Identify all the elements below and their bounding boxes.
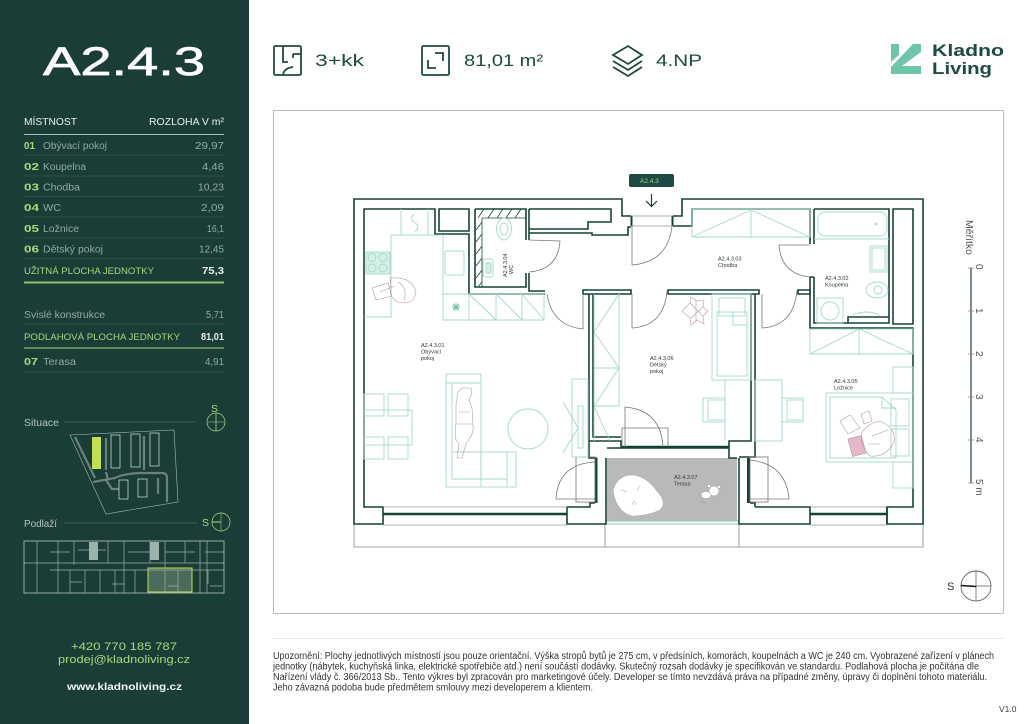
doors: [529, 226, 810, 502]
room labels: A2.4.3.05: [834, 379, 858, 385]
figure at kitchen: [372, 278, 416, 303]
disclaimer: Jeho závazná podoba bude předmětem smlouvy mezi developerem a klientem.: [273, 682, 593, 694]
table: rooms and areas: PODLAHOVÁ PLOCHA JEDNOTKY: [24, 332, 181, 343]
room labels: pokoj: [650, 369, 663, 375]
wc fixtures: [483, 218, 512, 277]
table: rooms and areas: 5,71: [206, 310, 224, 321]
room labels: WC: [509, 265, 515, 274]
room labels: [421, 253, 858, 488]
icon: entry arrow: [646, 194, 657, 206]
compass: [947, 571, 991, 601]
disclaimer: Nařízení vlády č. 366/2013 Sb.. Tento výkres byl zpracován pro marketingové účely. Developer se tímto nevzdává práva na případné změny, úpravy či doplnění tohoto materiálu.: [273, 672, 987, 683]
compass: S: [947, 581, 954, 593]
table: rooms and areas: Koupelna: [43, 162, 86, 173]
entry tag: [629, 174, 674, 187]
table: rooms and areas: Obývací pokoj: [43, 141, 107, 152]
icon: floor area: [422, 46, 449, 75]
table: rooms and areas: MÍSTNOST: [24, 115, 77, 128]
table: rooms and areas: 05: [24, 223, 39, 235]
kitchen: [364, 209, 544, 320]
bathroom fixtures: [814, 212, 889, 323]
table: rooms and areas: 04: [24, 202, 39, 214]
contact details: www.kladnoliving.cz: [66, 681, 182, 693]
scale bar: 0: [973, 264, 984, 270]
table: rooms and areas: ROZLOHA V m²: [149, 117, 225, 128]
room labels: A2.4.3.02: [825, 276, 849, 282]
scale bar: Měřítko: [963, 220, 974, 255]
contact details: +420 770 185 787: [71, 641, 177, 653]
icon: layers: [613, 46, 642, 76]
floor area value: 81,01 m²: [464, 51, 543, 70]
disclaimer: [272, 651, 994, 694]
floor plan: [354, 174, 923, 547]
site plan: situace: [24, 403, 225, 514]
table: rooms and areas: 81,01: [201, 332, 224, 343]
walls: [354, 199, 923, 525]
room labels: Chodba: [718, 263, 738, 269]
table: rooms and areas: 10,23: [198, 182, 224, 194]
figure on bed: [840, 411, 894, 457]
corridor wardrobe: [692, 209, 810, 237]
table: rooms and areas: 16,1: [207, 224, 224, 235]
title: unit code: A2.4.3: [43, 40, 205, 84]
scale bar: 1: [973, 308, 984, 314]
room labels: Ložnice: [834, 386, 853, 392]
figure on sofa: [455, 388, 473, 458]
table: rooms and areas: Ložnice: [43, 224, 79, 235]
children's room furniture: [594, 294, 751, 441]
table: rooms and areas: UŽITNÁ PLOCHA JEDNOTKY: [24, 266, 155, 277]
room labels: Dětský: [650, 362, 667, 368]
site plan: situace: Situace: [24, 417, 59, 429]
floor key plan: podlazi: Podlaží: [24, 518, 57, 530]
plant: [682, 297, 708, 325]
table: rooms and areas: 02: [24, 161, 39, 173]
room labels: A2.4.3.01: [421, 343, 445, 349]
wc hatch: [476, 209, 526, 287]
living room furniture: [364, 374, 588, 487]
room labels: A2.4.3.06: [650, 356, 674, 362]
disclaimer: jednotky (nábytek, kuchyňská linka, elektrické spotřebiče atd.) není součástí dodávky. Skutečný rozsah dodávky je specifikován ve standardu. Podlahová plocha je počítána dle: [272, 662, 980, 672]
room labels: A2.4.3.03: [718, 256, 742, 262]
icon: layout: [274, 46, 301, 75]
table: rooms and areas: 75,3: [202, 266, 224, 277]
table: rooms and areas: 03: [24, 182, 39, 194]
floor key plan: podlazi: [24, 513, 230, 593]
contact details: [58, 641, 190, 693]
scale bar: 3: [973, 394, 984, 400]
unit layout type: 3+kk: [315, 51, 365, 70]
panel: plan frame: [274, 110, 1004, 614]
scale bar: 4: [973, 437, 984, 443]
version: V1.0: [999, 704, 1017, 714]
table: rooms and areas: 29,97: [195, 141, 225, 152]
bedroom furniture: [755, 329, 913, 488]
scale bar: [963, 220, 984, 496]
table: rooms and areas: Chodba: [43, 182, 80, 194]
room labels: A2.4.3.04: [503, 253, 509, 277]
contact details: prodej@kladnoliving.cz: [58, 654, 190, 666]
room labels: Obývací: [421, 350, 442, 356]
terrace blob: [613, 475, 663, 516]
table: rooms and areas: 4,91: [205, 357, 224, 368]
outer lower outline: [354, 524, 923, 547]
logo: Kladno Living: [891, 41, 1004, 78]
table: rooms and areas: Dětský pokoj: [43, 244, 103, 256]
entry tag: A2.4.3: [640, 178, 659, 185]
terrace floor: [607, 458, 737, 521]
table: rooms and areas: 2,09: [201, 203, 225, 214]
logo: Kladno Living: Kladno: [932, 41, 1004, 60]
room labels: A2.4.3.07: [674, 475, 698, 481]
floor key plan: podlazi: S: [202, 517, 209, 529]
table: rooms and areas: 4,46: [202, 162, 224, 173]
logo: Kladno Living: Living: [932, 59, 992, 78]
table: rooms and areas: 01: [24, 140, 35, 152]
panel: left sidebar: [0, 0, 249, 724]
table: rooms and areas: Terasa: [43, 357, 76, 368]
table: rooms and areas: [24, 115, 225, 372]
table: rooms and areas: 12,45: [199, 244, 224, 256]
scale bar: 2: [973, 351, 984, 357]
teddy bear: [698, 484, 721, 504]
room labels: pokoj: [421, 356, 434, 362]
room labels: Koupelna: [825, 282, 849, 288]
floor number: 4.NP: [656, 51, 702, 70]
table: rooms and areas: WC: [43, 203, 61, 214]
room labels: Terasa: [674, 482, 691, 488]
site plan: situace: S: [211, 403, 218, 415]
table: rooms and areas: Svislé konstrukce: [24, 310, 105, 321]
scale bar: 5 m: [973, 479, 984, 496]
table: rooms and areas: 07: [24, 356, 38, 368]
table: rooms and areas: 06: [24, 244, 39, 256]
